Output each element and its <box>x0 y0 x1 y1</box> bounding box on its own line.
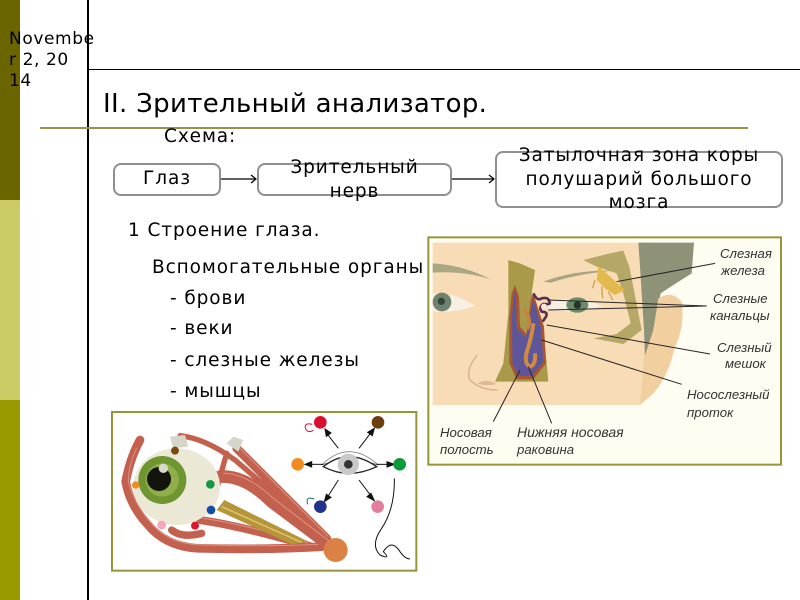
list: auxiliary organs: - мышцы <box>170 381 262 402</box>
flow diagram <box>113 145 783 213</box>
face skin <box>433 243 653 405</box>
date text: Novembe <box>9 29 95 49</box>
optic nerve <box>217 500 308 544</box>
figure: lacrimal apparatus <box>427 236 782 466</box>
anatomy labels: полость <box>440 442 494 457</box>
muscle bundles <box>126 436 332 549</box>
box: occipital cortex <box>495 151 783 208</box>
list: auxiliary organs: - слезные железы <box>170 350 360 371</box>
vertical rule <box>87 0 89 600</box>
anatomy labels: Слезный <box>717 340 772 355</box>
label: optic nerve: нерв <box>330 180 379 202</box>
iris <box>138 456 186 504</box>
left eyebrow <box>433 263 491 279</box>
orbit bone and lacrimal gland <box>583 251 642 344</box>
anatomy labels: проток <box>687 405 734 420</box>
label: occipital cortex <box>519 145 759 213</box>
pupil <box>147 467 171 491</box>
hair <box>638 243 694 358</box>
list: auxiliary organs: - веки <box>170 318 233 339</box>
label: optic nerve: Зрительный <box>290 157 419 178</box>
date text: 14 <box>9 71 32 91</box>
label: optic nerve <box>290 157 419 202</box>
tendons <box>170 435 243 452</box>
anatomy labels <box>440 246 772 457</box>
nasal cross-section <box>495 260 550 382</box>
gaze diagram <box>291 416 410 559</box>
anatomy labels: железа <box>720 263 765 278</box>
label: occipital cortex: Затылочная зона коры <box>519 145 759 166</box>
anatomy labels: Слезные <box>713 291 768 306</box>
title: II. Зрительный анализатор. <box>103 89 487 119</box>
pupil highlight <box>159 464 168 473</box>
eyeball <box>133 448 220 525</box>
arrows between boxes <box>221 174 495 184</box>
schema label: Схема: <box>164 126 236 147</box>
right eyebrow <box>543 271 615 283</box>
figure: eye muscles <box>111 411 418 572</box>
muscle colour markers <box>132 447 215 530</box>
box: eye <box>113 163 221 196</box>
right eye <box>548 297 603 313</box>
anatomy labels: канальцы <box>710 308 770 323</box>
muscle highlights <box>128 448 330 546</box>
label: occipital cortex: мозга <box>609 192 669 213</box>
list: auxiliary organs <box>170 288 360 402</box>
list: auxiliary organs: - брови <box>170 288 246 309</box>
subheading: auxiliary organs: Вспомогательные органы <box>152 257 424 278</box>
anatomy labels: мешок <box>725 356 767 371</box>
anatomy labels: Слезная <box>720 246 772 261</box>
label: occipital cortex: полушарий большого <box>525 168 753 190</box>
anatomy labels: Носослезный <box>687 387 770 402</box>
top horizontal rule <box>88 69 800 70</box>
muscle tendon origin <box>324 538 348 562</box>
label: eye: Глаз <box>143 168 191 189</box>
anatomy labels: Нижняя носовая <box>517 424 624 440</box>
heading: eye structure: 1 Строение глаза. <box>128 220 320 241</box>
title underline <box>40 127 748 129</box>
left eye <box>433 293 475 312</box>
leader lines <box>493 263 715 423</box>
ear <box>640 295 682 405</box>
anatomy labels: раковина <box>516 442 574 457</box>
date text <box>9 29 95 91</box>
box: optic nerve <box>257 163 452 196</box>
anatomy labels: Носовая <box>440 425 492 440</box>
sidebar colour bands <box>0 0 20 600</box>
date text: r 2, 20 <box>9 50 69 70</box>
nose outline <box>469 355 497 390</box>
